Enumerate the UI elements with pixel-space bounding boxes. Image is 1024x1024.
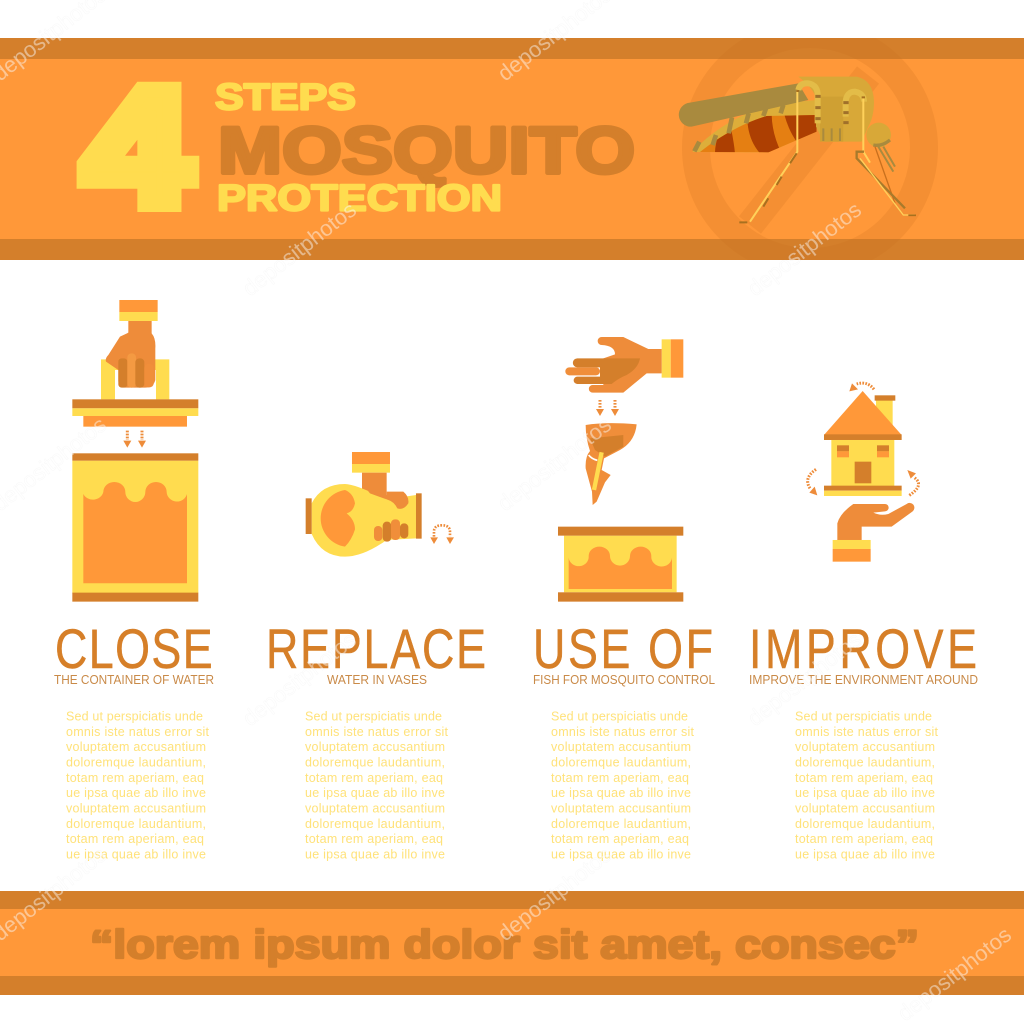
text block: use of: Sed ut perspiciatis unde	[551, 710, 688, 724]
cuff and arm	[352, 452, 390, 496]
subheading: close: THE CONTAINER OF WATER	[54, 673, 214, 687]
chimney	[875, 395, 895, 425]
legs	[739, 90, 916, 222]
text block: close: doloremque laudantium,	[66, 756, 206, 770]
watermarks: depositphotos	[238, 197, 361, 301]
circular arrows	[808, 383, 919, 495]
heading: improve: IMPROVE	[749, 617, 977, 680]
title: mosquito: MOSQUITO	[218, 113, 635, 187]
subheading: improve: IMPROVE THE ENVIRONMENT AROUND	[749, 673, 978, 687]
text block: close: ue ipsa quae ab illo inve	[66, 786, 206, 800]
text block: improve: voluptatem accusantium	[795, 740, 935, 754]
text block: close: totam rem aperiam, eaq	[66, 832, 204, 846]
text block: replace: totam rem aperiam, eaq	[305, 832, 443, 846]
text block: improve	[795, 710, 939, 862]
text block: replace: totam rem aperiam, eaq	[305, 771, 443, 785]
text block: use of: doloremque laudantium,	[551, 817, 691, 831]
footer banner	[0, 891, 1024, 995]
text block: replace: omnis iste natus error sit	[305, 725, 449, 739]
footer quote: “lorem ipsum dolor sit amet, consec”	[90, 923, 919, 967]
text block: close: doloremque laudantium,	[66, 817, 206, 831]
text block: replace: doloremque laudantium,	[305, 817, 445, 831]
text block: use of: voluptatem accusantium	[551, 802, 691, 816]
text block: improve: Sed ut perspiciatis unde	[795, 710, 932, 724]
text block: improve: ue ipsa quae ab illo inve	[795, 848, 935, 862]
prohibition sign	[682, 59, 938, 239]
text block: replace: voluptatem accusantium	[305, 802, 445, 816]
watermarks: depositphotos	[893, 922, 1016, 1024]
head	[866, 123, 895, 203]
text block: replace: Sed ut perspiciatis unde	[305, 710, 442, 724]
text block: replace	[305, 710, 449, 862]
text block: use of: doloremque laudantium,	[551, 756, 691, 770]
thorax	[798, 77, 874, 142]
fish tank	[558, 527, 683, 602]
text block: improve: totam rem aperiam, eaq	[795, 832, 933, 846]
roof	[824, 391, 902, 440]
watermarks: depositphotos	[493, 412, 616, 516]
abdomen	[692, 100, 820, 153]
watermarks: depositphotos	[238, 627, 361, 731]
heading: close: CLOSE	[55, 617, 213, 680]
vase	[306, 484, 422, 557]
text block: replace: ue ipsa quae ab illo inve	[305, 786, 445, 800]
text block: use of: voluptatem accusantium	[551, 740, 691, 754]
text block: use of: ue ipsa quae ab illo inve	[551, 786, 691, 800]
arrow: pour	[430, 525, 454, 544]
fish	[586, 423, 637, 505]
step 1 icon: closing the container	[72, 300, 198, 602]
text block: use of: omnis iste natus error sit	[551, 725, 695, 739]
text block: improve: voluptatem accusantium	[795, 802, 935, 816]
text block: replace: doloremque laudantium,	[305, 756, 445, 770]
text block: use of	[551, 710, 695, 862]
hand	[565, 337, 683, 393]
header banner	[0, 38, 1024, 260]
house walls	[824, 440, 902, 496]
subheading: use of: FISH FOR MOSQUITO CONTROL	[533, 673, 715, 687]
text block: improve: doloremque laudantium,	[795, 756, 935, 770]
text block: close: totam rem aperiam, eaq	[66, 771, 204, 785]
title: protection: PROTECTION	[217, 178, 502, 218]
text block: close: ue ipsa quae ab illo inve	[66, 848, 206, 862]
text block: close: voluptatem accusantium	[66, 802, 206, 816]
step 3 icon: adding fish	[558, 337, 683, 602]
text block: use of: totam rem aperiam, eaq	[551, 832, 689, 846]
upper hand on vase	[362, 483, 408, 509]
watermarks: depositphotos	[743, 197, 866, 301]
arrows down	[596, 400, 619, 416]
subheading: replace: WATER IN VASES	[327, 673, 427, 687]
step 2 icon: replacing vase water	[306, 452, 454, 557]
text block: improve: doloremque laudantium,	[795, 817, 935, 831]
supporting hand	[833, 503, 914, 562]
jar lid handle	[101, 359, 169, 399]
text block: close: Sed ut perspiciatis unde	[66, 710, 203, 724]
watermarks: depositphotos	[743, 627, 866, 731]
text block: replace: voluptatem accusantium	[305, 740, 445, 754]
title: steps: STEPS	[215, 76, 356, 118]
text block: close: omnis iste natus error sit	[66, 725, 210, 739]
wing	[679, 83, 808, 127]
hand gripping lid	[106, 300, 158, 388]
text block: use of: totam rem aperiam, eaq	[551, 771, 689, 785]
text block: replace: ue ipsa quae ab illo inve	[305, 848, 445, 862]
heading: replace: REPLACE	[266, 617, 486, 680]
title number 4: 4	[83, 55, 191, 240]
lid	[72, 399, 198, 427]
text block: use of: ue ipsa quae ab illo inve	[551, 848, 691, 862]
text block: close: voluptatem accusantium	[66, 740, 206, 754]
icon: mosquito	[679, 77, 916, 222]
text block: improve: totam rem aperiam, eaq	[795, 771, 933, 785]
heading: use of: USE OF	[533, 617, 713, 680]
text block: improve: ue ipsa quae ab illo inve	[795, 786, 935, 800]
water container	[72, 453, 198, 602]
step 4 icon: house on hand	[808, 383, 919, 562]
text block: close	[66, 710, 210, 862]
lower fingers	[374, 519, 408, 542]
watermarks: depositphotos	[493, 842, 616, 946]
text block: improve: omnis iste natus error sit	[795, 725, 939, 739]
arrows down	[123, 431, 146, 448]
